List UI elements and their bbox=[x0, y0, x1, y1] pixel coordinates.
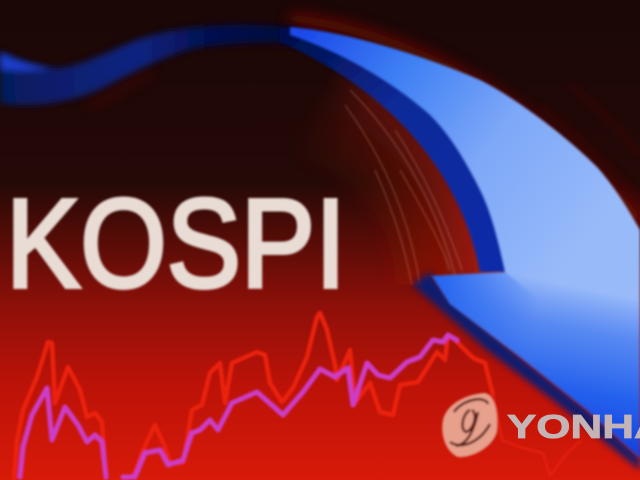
logo blob bbox=[442, 393, 498, 457]
Yonhap logo icon bbox=[442, 393, 498, 457]
pale streaks in red sweep bbox=[345, 90, 462, 285]
red price line, main section bbox=[123, 313, 493, 478]
red price line, left section bbox=[14, 342, 106, 478]
arrow tail highlight bbox=[0, 52, 52, 71]
red glow along arrow outer edge bbox=[90, 18, 640, 222]
arrow tail bbox=[0, 25, 296, 105]
inner red sweep under arrow bbox=[316, 76, 500, 283]
arrow face bbox=[290, 27, 640, 458]
KOSPI title: KOSPI bbox=[6, 173, 346, 314]
arrow dark inner band bbox=[280, 28, 515, 272]
price chart lines bbox=[14, 313, 580, 478]
arrowhead darkening bbox=[432, 272, 640, 458]
purple price line, left section bbox=[20, 388, 106, 477]
right-hand dark red streaks bbox=[540, 85, 640, 200]
red price line, faded tail bbox=[493, 395, 580, 476]
logo swirl bbox=[450, 399, 490, 446]
arrowhead bright left bbox=[432, 272, 540, 372]
arrowhead dark edge bbox=[413, 272, 640, 470]
purple price line, right section bbox=[123, 335, 457, 477]
arrow body and head bbox=[290, 27, 640, 458]
